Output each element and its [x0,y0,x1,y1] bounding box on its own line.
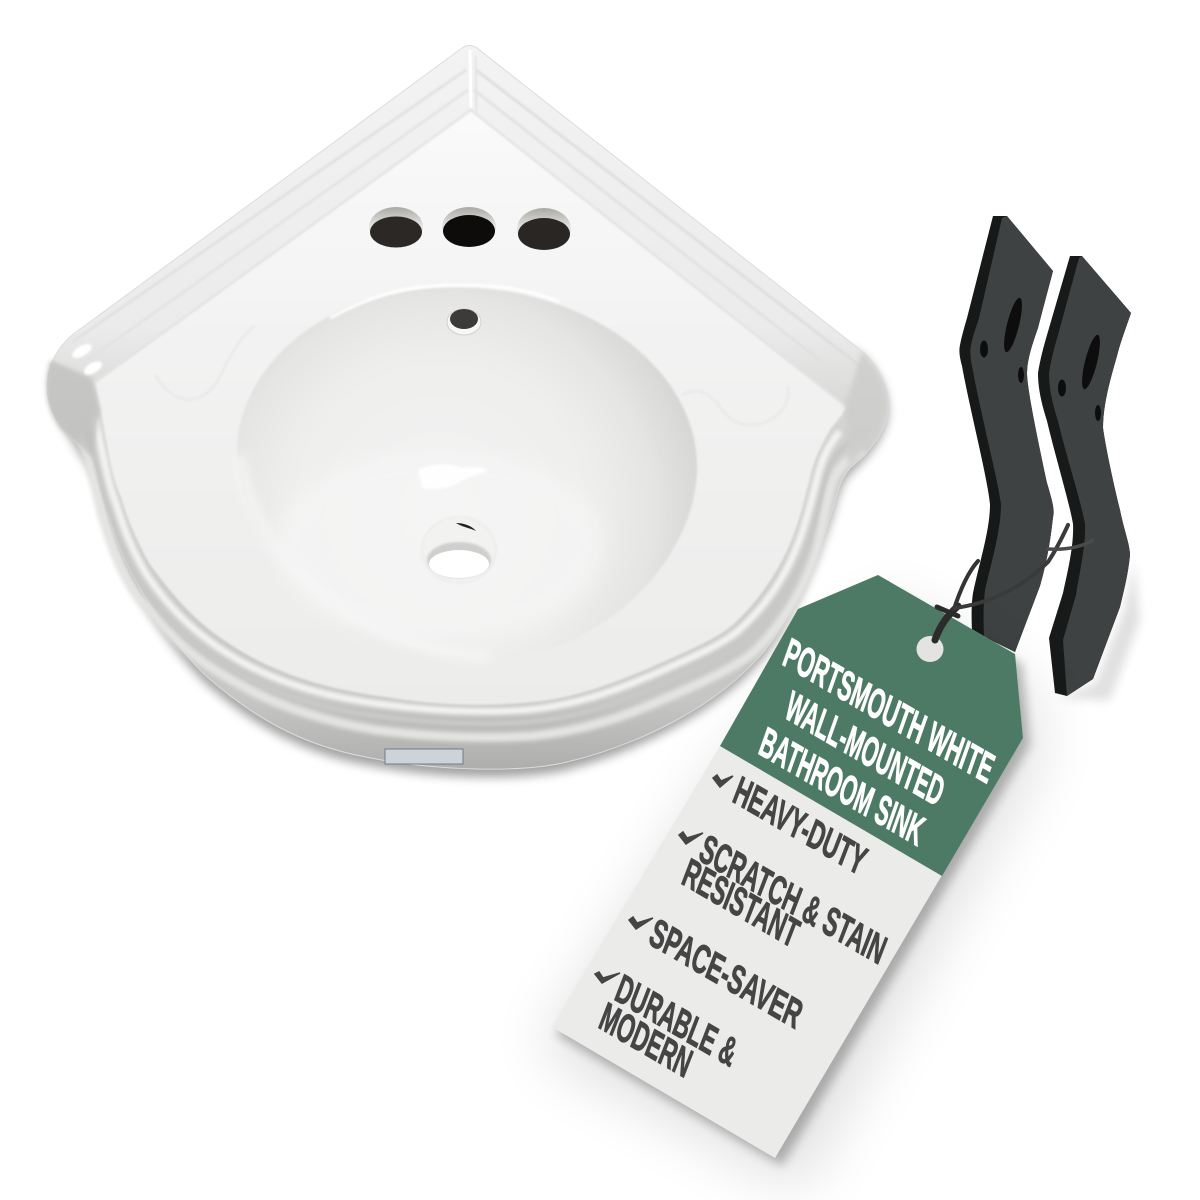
feature: space-saver: SPACE-SAVER [644,910,808,1038]
bottom label sticker [385,749,463,764]
title line 2: WALL-MOUNTED [780,681,950,815]
left lobe highlights [70,341,104,377]
sink outer body [47,46,888,769]
sink bowl [237,287,697,658]
title line 1: PORTSMOUTH WHITE [778,628,1000,793]
feature: space-saver [629,910,808,1038]
lower moulding ridges [82,420,860,737]
overflow hole [447,309,481,335]
feature: scratch and stain resistant: RESISTANT [677,850,805,957]
title line 3: BATHROOM SINK [754,717,930,855]
feature: scratch and stain resistant: SCRATCH & STAIN [694,826,892,974]
feature: scratch and stain resistant [677,826,892,974]
tag feature list [594,768,892,1087]
tag green header [720,575,1023,876]
rim inner edge line [95,110,847,407]
bracket 2 [1038,256,1140,700]
right lobe shading [845,352,887,466]
bowl lower-left light edge [240,455,490,657]
drain [422,517,496,583]
bracket 1 [959,216,1054,652]
feature: durable and modern: DURABLE & [610,966,743,1076]
feature: heavy-duty: HEAVY-DUTY [728,768,872,884]
bowl rim highlight [330,285,560,318]
rim swirls [155,325,788,425]
faucet holes [369,207,571,250]
bowl soft light [275,450,605,640]
feature: durable and modern: MODERN [594,994,698,1087]
bracket 2 holes [1058,333,1104,421]
tag title [754,628,1000,855]
bracket 1 face [970,216,1054,652]
tag shadow [540,585,1040,1190]
string tie [935,525,1093,640]
bracket 2 shadow [1056,560,1140,700]
tag white body [552,575,1023,1158]
tag eyelet hole [916,636,944,662]
hang tag [552,575,1023,1158]
feature: heavy-duty [713,768,872,884]
sink flat rim face [95,110,847,705]
bracket 1 holes [980,296,1026,383]
feature: durable and modern [594,966,743,1087]
bracket 2 face [1049,256,1131,696]
sink [46,46,888,769]
bracket 2 side [1038,256,1131,696]
bracket 1 side [959,216,1054,652]
left lobe shading [46,360,100,458]
upper moulding lines [72,50,868,390]
sink shadow [60,300,888,777]
bowl gloss highlight [418,464,488,489]
